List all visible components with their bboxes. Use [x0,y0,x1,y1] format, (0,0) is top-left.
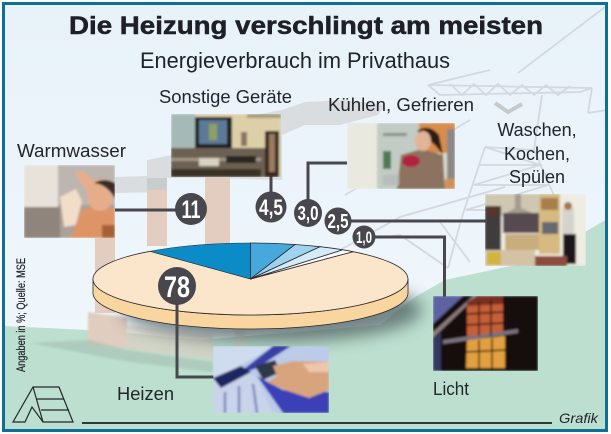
footer rule [82,422,552,424]
photo: Heizen radiator thermostat [213,346,329,413]
logo [13,387,73,422]
badge: 78: 78 [164,271,190,304]
label: Kuehlen Gefrieren: Kühlen, Gefrieren [328,95,474,115]
badge: 2,5: 2,5 [328,211,348,233]
pie slice: Sonstige Geraete 4,5 [250,243,295,279]
badge: 2,5 [324,208,352,234]
pie slice: Warmwasser 11 [150,243,250,279]
chimney bases [88,312,245,360]
badge: 11 [175,193,207,225]
title: Die Heizung verschlingt am meisten [69,12,543,40]
photo: Sonstige Geraete television [171,114,281,177]
pie slice: Kuehlen 3,0 [250,244,320,279]
badge: 11: 11 [182,196,201,224]
photo: Warmwasser shower [24,165,115,238]
pie side wall [93,279,408,329]
smoke plume [115,100,385,193]
power pylon [340,7,607,268]
green ground [3,219,607,431]
pie slice: Licht 1,0 [250,250,353,279]
label: Waschen Kochen Spuelen [497,120,577,187]
badge: 3,0 [294,199,322,227]
label: Licht: Licht [433,379,469,399]
photo: Waschen Kochen Spuelen kitchen [485,194,586,266]
label: Waschen Kochen Spuelen: Waschen, [497,120,577,140]
connector lines [115,163,486,377]
badge: 4,5 [256,192,286,222]
badge: 4,5: 4,5 [259,195,283,220]
pie chart [93,243,408,329]
pie chart shadow [122,278,422,342]
label: Sonstige Geraete: Sonstige Geräte [159,87,292,107]
pie slice: Waschen 2,5 [250,247,343,279]
ground shadow of chimneys [30,340,213,372]
label: Waschen Kochen Spuelen: Kochen, [504,144,570,164]
badge: 1,0: 1,0 [356,228,372,247]
footer credit: Grafik: Grafik [559,410,599,426]
badge: 1,0 [352,226,376,248]
label: Waschen Kochen Spuelen: Spülen [509,167,565,187]
label: Heizen: Heizen [117,384,174,404]
badge: 3,0: 3,0 [298,203,318,225]
chimneys [95,177,230,313]
photo: Licht house at night [433,296,538,371]
pie slice: Heizen 78 [93,251,408,315]
source note: Angaben in %; Quelle: MSE [16,258,28,372]
subtitle: Energieverbrauch im Privathaus [140,48,450,73]
pylon insulator [495,103,522,112]
photo: Kuehlen refrigerator [347,123,455,189]
label: Warmwasser: Warmwasser [17,141,126,161]
